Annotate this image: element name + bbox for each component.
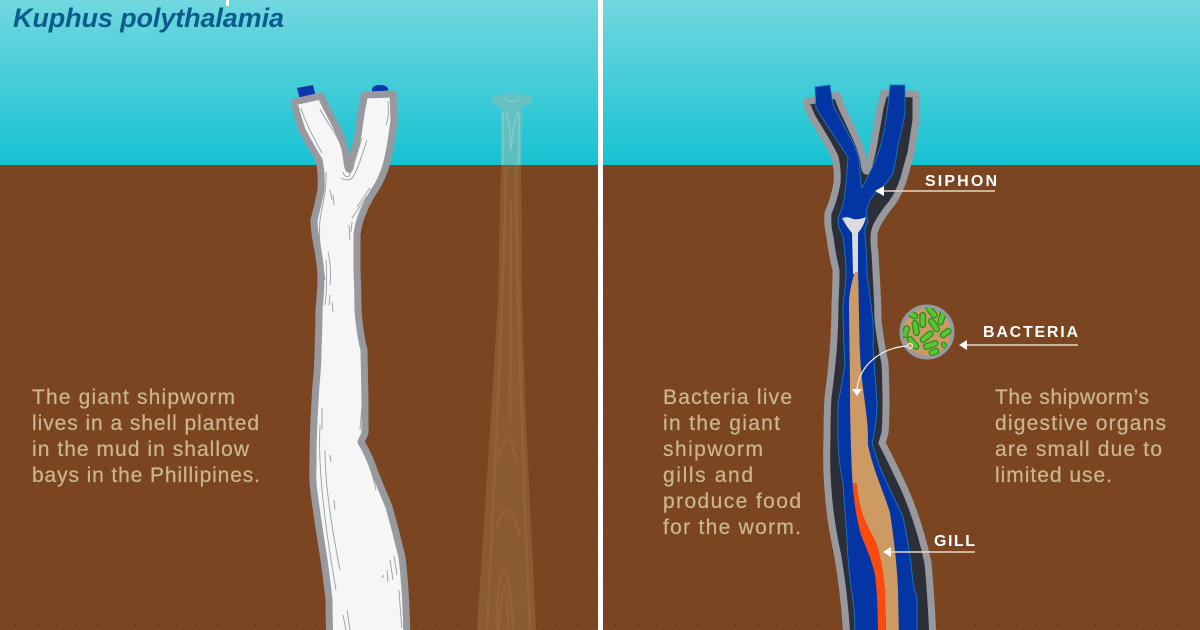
text block: bacteria: Bacteria live (663, 386, 792, 409)
label: gill (883, 533, 975, 557)
title: Kuphus polythalamia (13, 3, 284, 33)
label: siphon: SIPHON (925, 173, 997, 190)
bacteria cells (902, 308, 952, 356)
text block: bacteria: in the giant (663, 412, 780, 435)
gill (853, 483, 886, 630)
text block: digestive organs: are small due to (995, 438, 1162, 461)
text block: habitat: The giant shipworm (32, 386, 235, 409)
text block: digestive organs: The shipworm’s (995, 386, 1149, 409)
label: bacteria (959, 324, 1078, 350)
text block: digestive organs (995, 386, 1166, 487)
water background right (603, 0, 1200, 165)
icon: bacteria magnifier (901, 305, 952, 358)
text block: bacteria: gills and (663, 464, 753, 487)
text block: digestive organs: digestive organs (995, 412, 1166, 435)
arrow: bacteria to gill (852, 344, 912, 396)
outer shell (806, 93, 933, 630)
shell crack lines (301, 101, 402, 630)
text block: habitat: in the mud in shallow (32, 438, 250, 461)
icon: siphon tips (297, 85, 388, 100)
text block: bacteria (663, 386, 801, 539)
illustration: white shell (294, 94, 407, 630)
white stem (842, 217, 866, 274)
label: siphon (875, 173, 997, 196)
illustration: wood ghost shell (477, 93, 536, 630)
illustration: cross-section of shell (806, 85, 933, 630)
white tick (226, 0, 229, 6)
divider (598, 0, 603, 630)
panel: right (603, 0, 1200, 630)
text block: habitat: bays in the Phillipines. (32, 464, 260, 487)
panel: left (0, 0, 598, 630)
text block: habitat: lives in a shell planted (32, 412, 259, 435)
digestive organ (849, 272, 899, 630)
mud background right (603, 165, 1200, 630)
siphon and mantle (815, 85, 917, 630)
label: bacteria: BACTERIA (983, 324, 1078, 341)
water background left (0, 0, 598, 165)
mud background left (0, 165, 598, 630)
text block: habitat (32, 386, 260, 487)
text block: bacteria: produce food (663, 490, 801, 513)
label: gill: GILL (934, 533, 975, 550)
text block: bacteria: for the worm. (663, 516, 801, 539)
text block: digestive organs: limited use. (995, 464, 1112, 487)
text block: bacteria: shipworm (663, 438, 763, 461)
